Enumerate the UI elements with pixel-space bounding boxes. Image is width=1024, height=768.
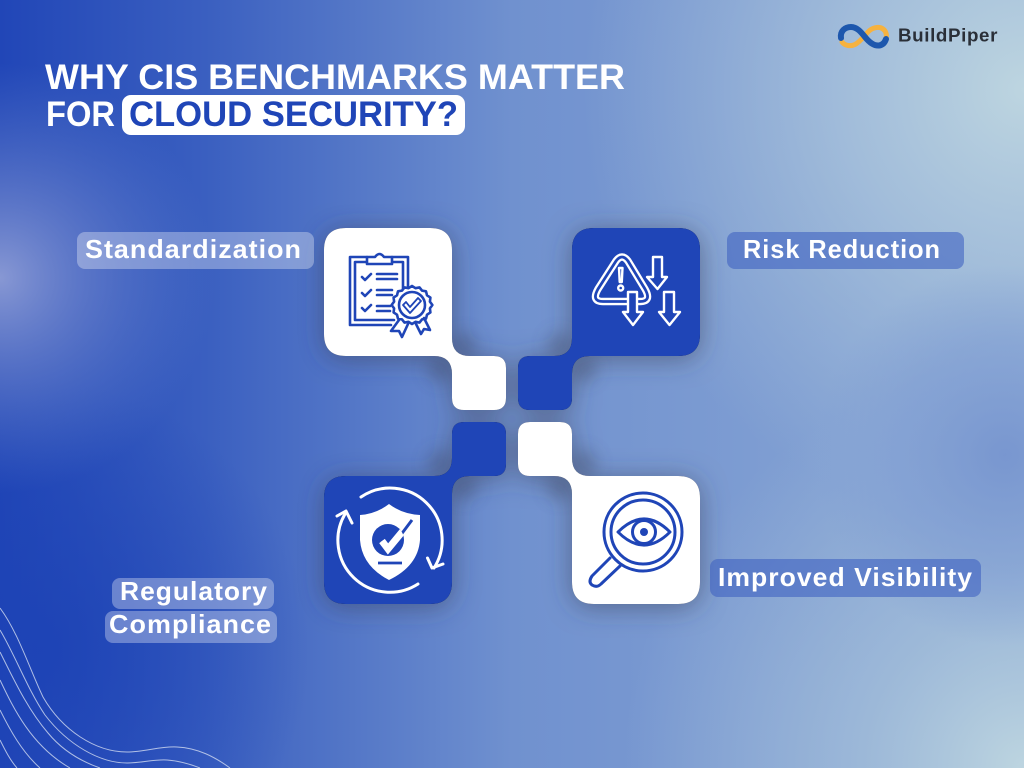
icon: magnifier with eye (590, 493, 682, 586)
label: Standardization: Standardization (85, 234, 302, 264)
label: Risk Reduction (727, 232, 964, 269)
panel: improved visibility tile (518, 422, 700, 604)
icon: warning triangle and down arrows (595, 257, 680, 325)
decorative wave lines (0, 608, 230, 768)
label: Improved Visibility: Improved Visibility (718, 562, 973, 592)
label: Risk Reduction: Risk Reduction (743, 234, 941, 264)
blue connector shape (324, 422, 506, 604)
panel: regulatory compliance tile (324, 422, 506, 604)
blue connector shape (518, 228, 700, 410)
title line 1: WHY CIS BENCHMARKS MATTER (45, 57, 625, 97)
label: Regulatory Compliance (105, 576, 277, 643)
title highlight pill: CLOUD SECURITY? (129, 94, 458, 134)
logo: BuildPiper (841, 24, 998, 46)
white connector shape (324, 228, 506, 410)
tile shadows (324, 228, 700, 604)
title line 2 prefix: FOR (46, 94, 115, 134)
icon: shield with check and cycle arrows (337, 488, 443, 592)
logo wordmark: BuildPiper (898, 24, 998, 46)
logo mark: infinity loop (841, 27, 886, 46)
white connector shape (518, 422, 700, 604)
label line: Regulatory: Regulatory (120, 576, 268, 606)
title (45, 57, 625, 135)
panel: risk reduction tile (518, 228, 700, 410)
label line: Compliance: Compliance (109, 609, 272, 639)
panel: standardization tile (324, 228, 506, 410)
icon: clipboard with badge (350, 254, 432, 337)
